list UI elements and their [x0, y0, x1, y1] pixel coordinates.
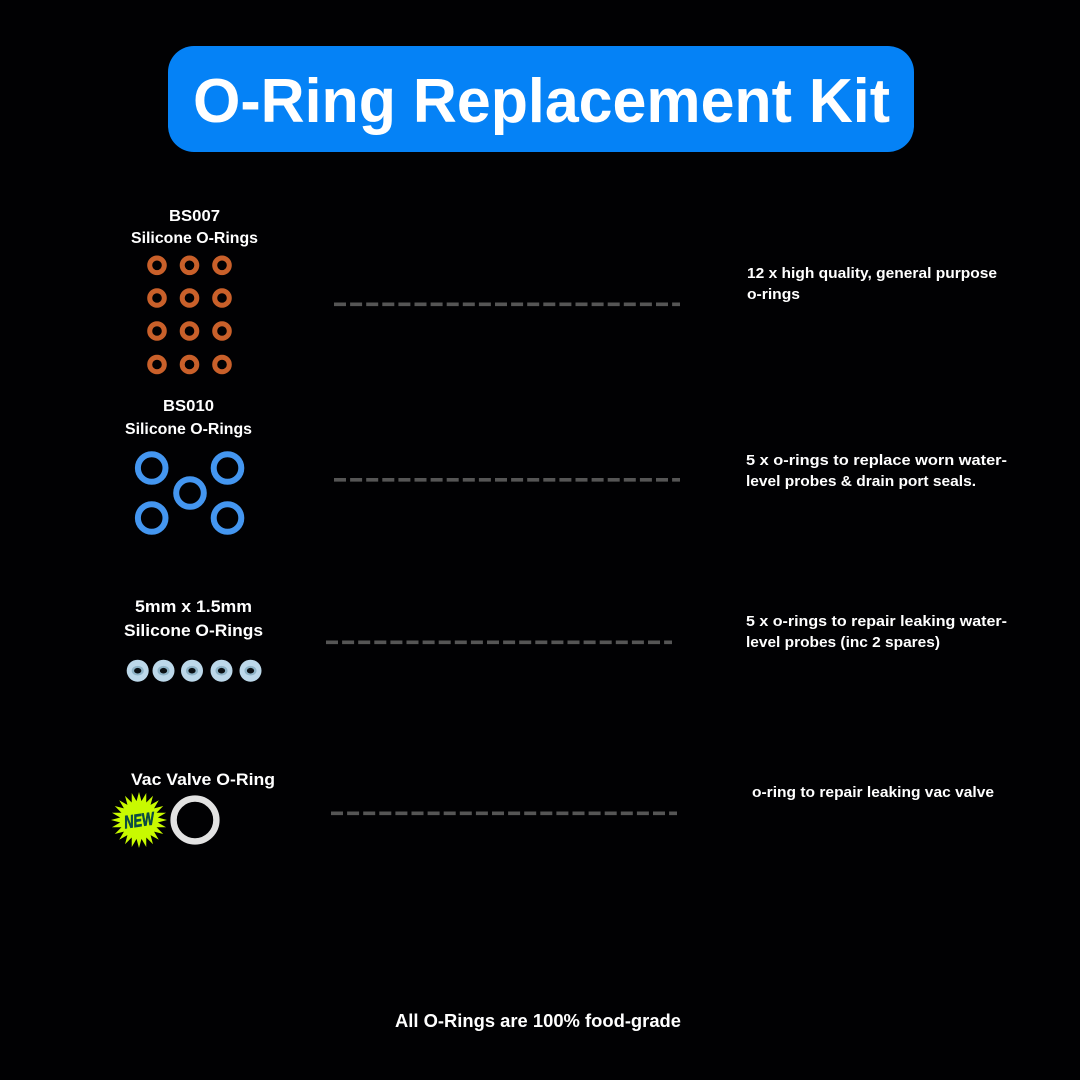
connector: Vac Valve	[331, 811, 677, 815]
panel: 5mm x 1.5mm	[124, 597, 1007, 682]
heading: BS010: Silicone O-Rings	[125, 421, 252, 438]
heading: BS010: BS010	[163, 398, 214, 415]
description: 5mm x 1.5mm: level probes (inc 2 spares)	[746, 634, 940, 651]
panel: Vac Valve	[111, 770, 994, 848]
heading: BS007: BS007	[169, 208, 220, 225]
panel: BS007	[131, 208, 997, 372]
connector: BS010	[334, 478, 680, 482]
heading: 5mm x 1.5mm	[124, 597, 263, 640]
heading: BS007	[131, 208, 258, 247]
heading: 5mm x 1.5mm: Silicone O-Rings	[124, 621, 263, 640]
heading: BS010	[125, 398, 252, 438]
title: O-Ring Replacement Kit	[193, 67, 890, 136]
description: 5mm x 1.5mm: 5 x o-rings to repair leaking water-	[746, 613, 1007, 630]
heading: BS007: Silicone O-Rings	[131, 230, 258, 247]
footer note: All O-Rings are 100% food-grade	[395, 1011, 681, 1031]
icon: five blue o-rings	[138, 454, 241, 532]
description: BS007: 12 x high quality, general purpose	[747, 265, 997, 282]
heading: 5mm x 1.5mm: 5mm x 1.5mm	[135, 597, 252, 616]
panel: BS010	[125, 398, 1007, 532]
icon: new starburst badge: NEW	[123, 808, 157, 832]
description: BS007: o-rings	[747, 286, 800, 303]
heading: Vac Valve O-Ring: Vac Valve O-Ring	[131, 770, 275, 789]
icon: new starburst badge	[111, 792, 167, 848]
description: Vac Valve: o-ring to repair leaking vac valve	[752, 784, 994, 801]
connector: BS007	[334, 302, 680, 306]
icon: five translucent o-rings	[127, 660, 262, 682]
description: BS010: 5 x o-rings to replace worn water-	[746, 452, 1007, 469]
icon: white o-ring	[174, 799, 216, 841]
icon: twelve orange o-rings	[150, 258, 229, 372]
description: BS010	[746, 452, 1007, 490]
description: BS010: level probes & drain port seals.	[746, 473, 976, 490]
description: 5mm x 1.5mm	[746, 613, 1007, 651]
title	[168, 46, 914, 152]
connector: 5mm x 1.5mm	[326, 640, 672, 644]
description: BS007	[747, 265, 997, 303]
